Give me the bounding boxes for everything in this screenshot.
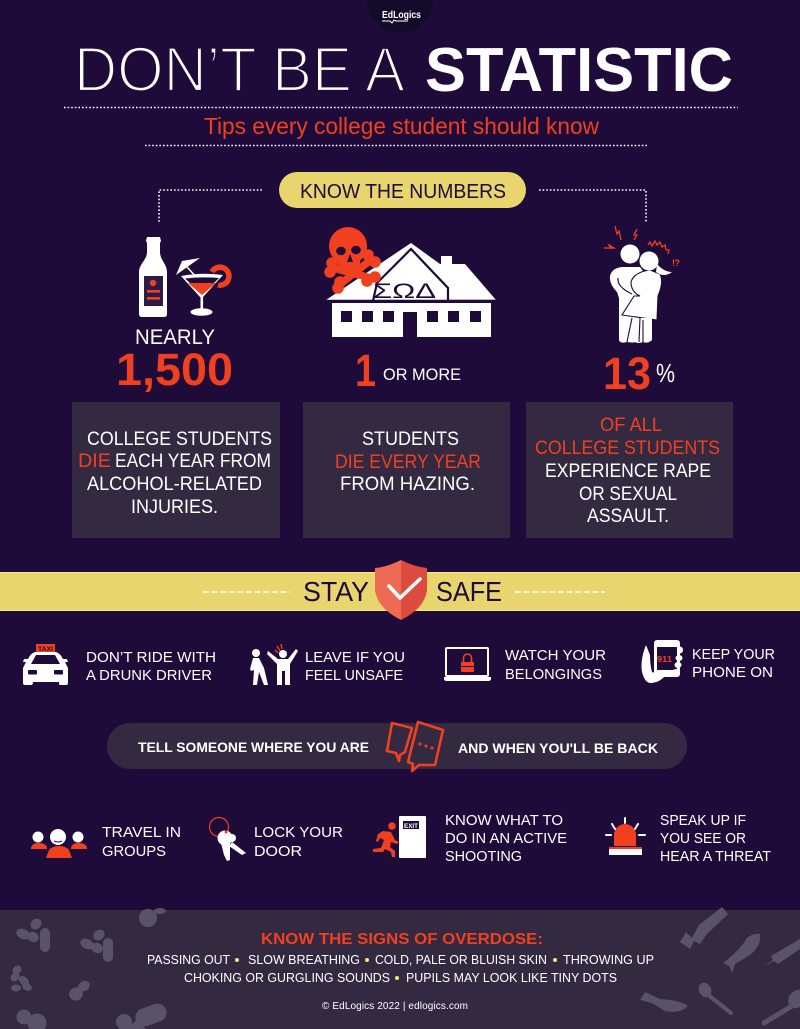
banner: stay safe [0, 560, 800, 620]
panel: alcohol: DIE [78, 451, 111, 472]
tip: keys [210, 818, 343, 861]
title: STATISTIC [425, 36, 733, 105]
stat: 13 percent: % [656, 358, 675, 388]
stat: 1 or more: OR MORE [383, 365, 461, 384]
panel: alcohol: COLLEGE STUDENTS [87, 429, 272, 450]
panel: sexual assault: ASSAULT. [587, 506, 669, 527]
tip: active shooting exit: SHOOTING [445, 848, 522, 865]
panel: hazing: DIE EVERY YEAR [335, 452, 481, 473]
callout: tell someone: TELL SOMEONE WHERE YOU ARE [138, 739, 369, 755]
tip: laptop with lock [444, 647, 606, 683]
tip: siren: SPEAK UP IF [660, 812, 746, 829]
panel: sexual assault: COLLEGE STUDENTS [535, 438, 720, 459]
tip: phone with 911: PHONE ON [692, 664, 773, 681]
tip: taxi: A DRUNK DRIVER [86, 667, 212, 684]
tip: keys: LOCK YOUR [254, 824, 343, 841]
tip: keys: DOOR [254, 843, 302, 860]
tip: siren: HEAR A THREAT [660, 848, 771, 865]
icon: fraternity house with skull [324, 227, 496, 337]
tip: taxi: TAXI [38, 646, 53, 653]
banner: stay safe: SAFE [436, 576, 502, 607]
tip: active shooting exit: EXIT [404, 824, 418, 830]
symptoms list: CHOKING OR GURGLING SOUNDS [184, 970, 390, 985]
panel: alcohol: INJURIES. [131, 497, 218, 518]
icon: beer bottle [139, 237, 167, 317]
panel: sexual assault: OF ALL [600, 415, 662, 436]
panel: sexual assault: OR SEXUAL [579, 484, 677, 505]
tip: laptop with lock: WATCH YOUR [505, 647, 606, 664]
tip: travel in groups: TRAVEL IN [102, 824, 181, 841]
tip: siren: YOU SEE OR [660, 830, 746, 847]
tip: taxi [23, 644, 216, 685]
tip: phone with 911 [642, 640, 775, 683]
stat: 1 or more: 1 [355, 345, 376, 396]
logo [367, 0, 433, 33]
symptoms list: PASSING OUT [147, 952, 230, 967]
panel: alcohol: EACH YEAR FROM [115, 451, 271, 472]
symptoms list [147, 952, 654, 985]
decoration: pills and paraphernalia [9, 907, 800, 1029]
tip: leave if unsafe [250, 644, 405, 685]
copyright: © EdLogics 2022 | edlogics.com [322, 1001, 468, 1012]
tip: active shooting exit: KNOW WHAT TO [445, 812, 563, 829]
callout: tell someone: AND WHEN YOU'LL BE BACK [458, 740, 658, 756]
tip: travel in groups [31, 824, 181, 860]
tip: leave if unsafe: FEEL UNSAFE [305, 667, 403, 684]
icon: couple with distress marks: !? [672, 258, 680, 268]
banner: stay safe: STAY [303, 576, 369, 607]
tip: siren [606, 812, 771, 865]
tip: taxi: DON’T RIDE WITH [86, 649, 216, 666]
panel: alcohol [72, 402, 280, 538]
tip: leave if unsafe: LEAVE IF YOU [305, 649, 405, 666]
panel: signs of overdose [0, 907, 800, 1029]
icon: two phones [387, 722, 443, 771]
title [74, 35, 733, 105]
panel: hazing: STUDENTS [362, 429, 459, 450]
icon: couple with distress marks [604, 226, 680, 343]
heading: know the numbers: KNOW THE NUMBERS [300, 181, 506, 203]
subtitle: Tips every college student should know [204, 113, 599, 139]
tip: phone with 911: KEEP YOUR [692, 646, 775, 663]
panel: alcohol: ALCOHOL-RELATED [87, 474, 262, 495]
tip: active shooting exit: DO IN AN ACTIVE [445, 830, 567, 847]
title: DON’T BE A [74, 35, 405, 105]
stat: 1 or more [355, 345, 461, 396]
stat: 1,500: 1,500 [116, 344, 233, 395]
tip: active shooting exit [373, 812, 567, 865]
tip: travel in groups: GROUPS [102, 843, 166, 860]
symptoms list: PUPILS MAY LOOK LIKE TINY DOTS [406, 970, 617, 985]
tip: laptop with lock: BELONGINGS [505, 666, 602, 683]
callout: tell someone [107, 722, 687, 771]
icon: fraternity house with skull: ΣΩΔ [373, 280, 436, 303]
tip: phone with 911: 911 [657, 654, 672, 664]
logo: EdLogics [382, 10, 421, 21]
panel: hazing [303, 402, 510, 538]
panel: sexual assault [526, 402, 733, 538]
symptoms list: THROWING UP [563, 952, 654, 967]
stat: 13 percent: 13 [603, 348, 651, 399]
stat: 13 percent [603, 348, 675, 399]
panel: sexual assault: EXPERIENCE RAPE [545, 461, 711, 482]
symptoms list: SLOW BREATHING [248, 952, 360, 967]
icon: cocktail [176, 258, 229, 316]
text: nearly: NEARLY [135, 326, 215, 349]
panel: hazing: FROM HAZING. [340, 474, 475, 495]
heading: KNOW THE SIGNS OF OVERDOSE: [261, 931, 543, 948]
symptoms list: COLD, PALE OR BLUISH SKIN [375, 952, 547, 967]
heading: know the numbers [279, 172, 526, 208]
